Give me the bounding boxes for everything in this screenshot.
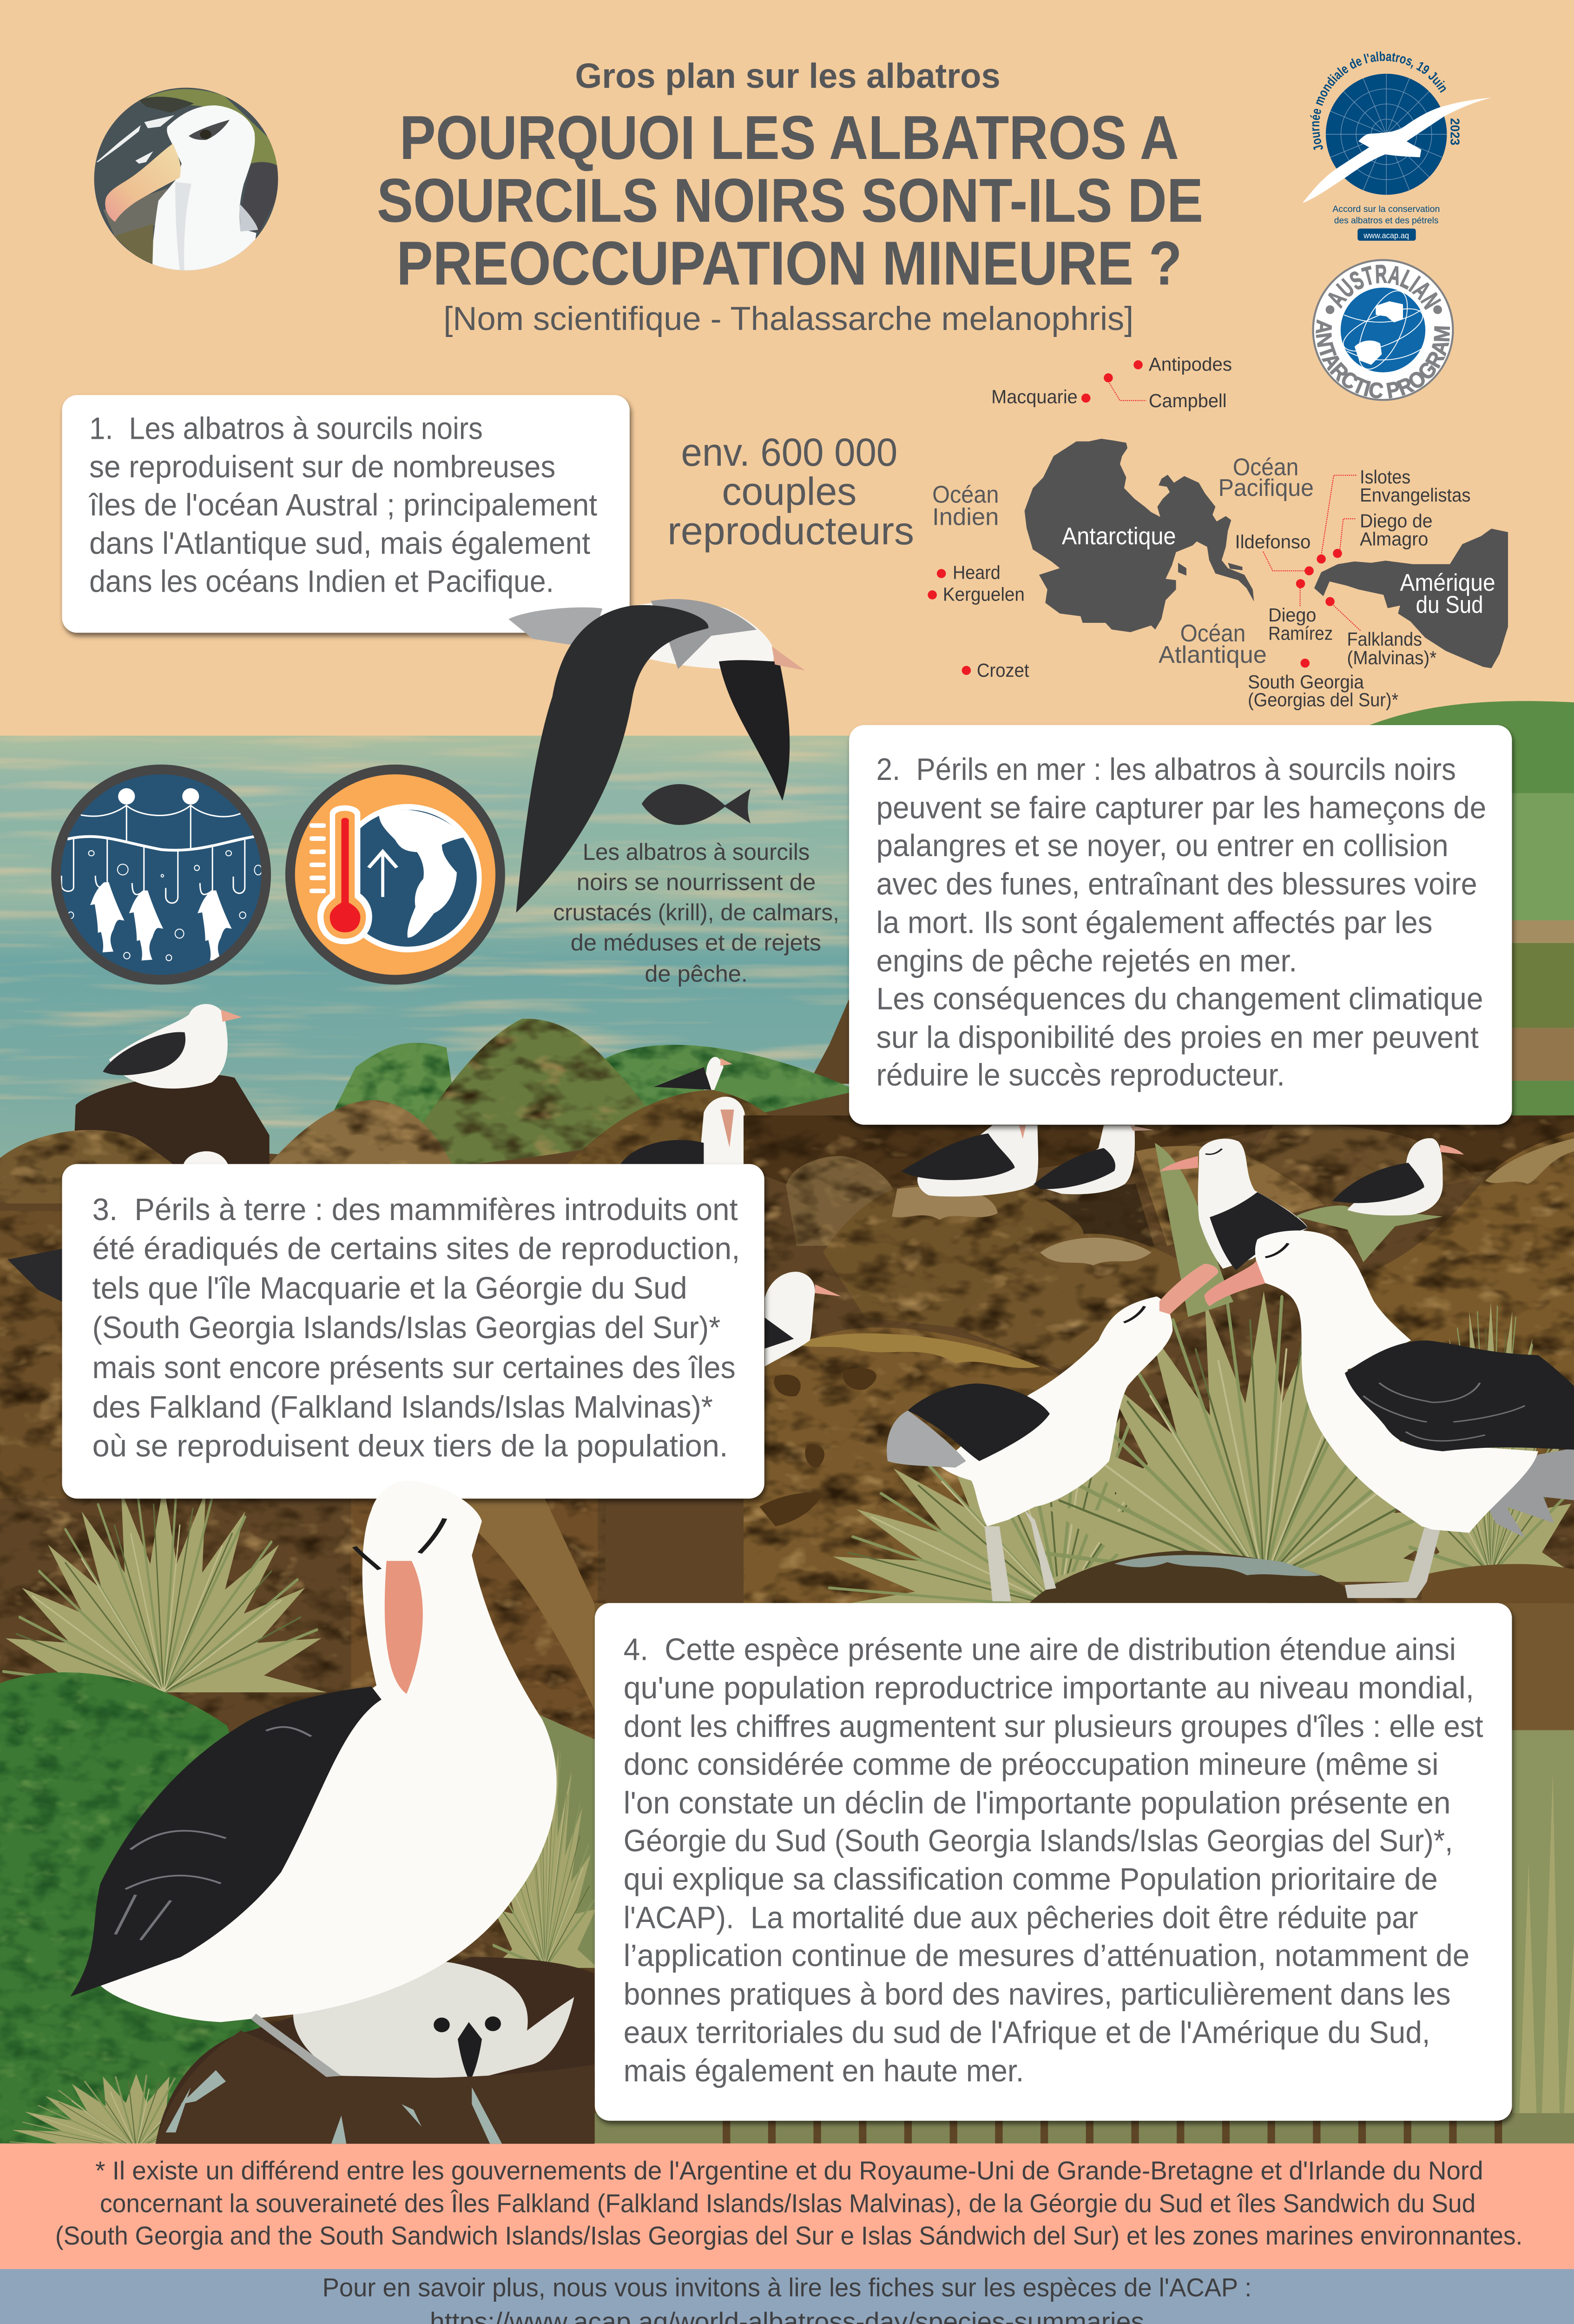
map island labels: Ildefonso <box>1235 531 1311 552</box>
map ocean and continent labels: Antarctique <box>1062 523 1176 550</box>
brown mounds, upper left and centre <box>0 1090 825 1514</box>
panel 3: perils on land: mais sont encore présents sur certaines des îles <box>92 1351 736 1385</box>
map island labels: Islotes <box>1360 466 1410 488</box>
footnote band: concernant la souveraineté des Îles Falkland (Falkland Islands/Islas Malvinas), de la Géorgie du Sud et îles Sandwich du Sud <box>100 2189 1475 2218</box>
main title: SOURCILS NOIRS SONT-ILS DE <box>377 166 1203 235</box>
panel 3: perils on land: (South Georgia Islands/Islas Georgias del Sur)* <box>92 1311 720 1345</box>
panel 3: perils on land: tels que l'île Macquarie et la Géorgie du Sud <box>92 1271 687 1306</box>
map island labels: Kerguelen <box>943 583 1025 605</box>
nest <box>156 1957 594 2144</box>
breeding pairs statistic: couples <box>722 469 856 513</box>
panel 1: breeding range <box>62 395 630 633</box>
strip of grass along lower edge and right of card 4 <box>595 1603 1574 2150</box>
map island labels: Diego de <box>1360 510 1432 532</box>
panel 2: perils at sea: engins de pêche rejetés en mer. <box>876 944 1297 978</box>
panel 3: perils on land: été éradiqués de certains sites de reproduction, <box>92 1232 740 1266</box>
footnote band <box>0 2144 1574 2269</box>
map island labels: Almagro <box>1360 528 1428 549</box>
brown mounds, right side <box>744 1116 1574 1604</box>
chick <box>293 1960 574 2079</box>
map island labels <box>943 354 1471 710</box>
breeding pairs statistic: env. 600 000 <box>681 430 897 474</box>
logo: Australian Antarctic Program <box>1311 259 1455 404</box>
map ocean and continent labels: du Sud <box>1416 591 1483 618</box>
panel 3: perils on land: 3. Périls à terre : des mammifères introduits ont <box>92 1193 738 1227</box>
logo: World Albatross Day ACAP: Accord sur la conservation <box>1332 204 1440 214</box>
map land: Antarctica and South America <box>1025 439 1508 668</box>
map island labels: Macquarie <box>991 386 1078 408</box>
breeding pairs statistic: reproducteurs <box>667 508 914 553</box>
map ocean and continent labels: Indien <box>932 503 999 530</box>
nests bottom right <box>1030 1551 1574 1603</box>
adult eyes <box>355 1519 445 1570</box>
panel 4: status and mitigation: qu'une population reproductrice importante au niveau mondial, <box>624 1671 1474 1705</box>
main title <box>377 103 1203 298</box>
map ocean and continent labels: Océan <box>932 482 999 508</box>
courting bird left <box>887 1264 1218 1601</box>
map island labels: Falklands <box>1347 628 1422 650</box>
supertitle: Gros plan sur les albatros <box>575 56 1001 95</box>
standing bird behind pair <box>1159 1139 1308 1270</box>
map island labels: South Georgia <box>1248 671 1364 693</box>
map ocean and continent labels: Atlantique <box>1159 641 1267 668</box>
group of birds right <box>765 1125 1574 1601</box>
panel 2: perils at sea: peuvent se faire capturer par les hameçons de <box>876 791 1486 825</box>
icon: longline fishing <box>51 765 271 984</box>
map: breeding sites <box>928 354 1508 710</box>
lower left ground <box>0 1484 606 2150</box>
panel 3: perils on land <box>62 1164 764 1499</box>
map island labels: Crozet <box>977 660 1029 681</box>
breeding pairs statistic <box>667 430 914 553</box>
logo: World Albatross Day ACAP: des albatros et des pétrels <box>1334 215 1439 225</box>
map leader lines <box>1108 381 1361 631</box>
logo: World Albatross Day ACAP: 2023 <box>1448 118 1462 145</box>
logo: World Albatross Day ACAP: www.acap.aq <box>1363 231 1409 240</box>
panel 4: status and mitigation: l'ACAP). La mortalité due aux pêcheries doit être réduite par <box>624 1901 1418 1935</box>
bird peeking beside card 3 <box>765 1272 842 1367</box>
panel 4: status and mitigation: bonnes pratiques à bord des navires, particulièrement dans les <box>624 1977 1451 2012</box>
main title: PREOCCUPATION MINEURE ? <box>396 229 1182 298</box>
panel 4: status and mitigation: dont les chiffres augmentent sur plusieurs groupes d'îles : elle est <box>624 1710 1483 1744</box>
panel 3: perils on land: des Falkland (Falkland Islands/Islas Malvinas)* <box>92 1390 713 1425</box>
further reading band: Pour en savoir plus, nous vous invitons à lire les fiches sur les espèces de l'ACAP : <box>323 2273 1251 2302</box>
map site markers <box>928 360 1342 675</box>
panel 2: perils at sea: Les conséquences du changement climatique <box>876 982 1483 1017</box>
small background birds, centre <box>7 1057 748 1302</box>
logo: Australian Antarctic Program: AUSTRALIAN <box>1321 259 1446 313</box>
panel 3: perils on land: où se reproduisent deux tiers de la population. <box>92 1429 728 1464</box>
diet caption: crustacés (krill), de calmars, <box>553 899 839 925</box>
panel 4: status and mitigation: Géorgie du Sud (South Georgia Islands/Islas Georgias del Sur)*, <box>624 1824 1453 1858</box>
panel 1: breeding range: dans les océans Indien et Pacifique. <box>89 564 554 599</box>
map island labels: Antipodes <box>1149 354 1232 375</box>
bird under card 2, right <box>1034 1125 1154 1194</box>
panel 1: breeding range: îles de l'océan Austral ; principalement <box>88 488 598 522</box>
diet caption: de pêche. <box>645 960 748 987</box>
nesting bird top right <box>1294 1138 1464 1262</box>
main title: POURQUOI LES ALBATROS A <box>400 103 1179 172</box>
further reading band <box>0 2269 1574 2324</box>
panel 4: status and mitigation: l’application continue de mesures d’atténuation, notamment de <box>624 1939 1469 1973</box>
scientific name: [Nom scientifique - Thalassarche melanophris] <box>443 300 1133 337</box>
map ocean and continent labels: Amérique <box>1400 569 1495 596</box>
back hills <box>0 1019 863 2150</box>
footnote band: * Il existe un différend entre les gouvernements de l'Argentine et du Royaume-Uni de Grande-Bretagne et d'Irlande du Nord <box>95 2156 1483 2185</box>
panel 4: status and mitigation: eaux territoriales du sud de l'Afrique et de l'Amérique du Sud, <box>624 2016 1430 2050</box>
panel 1: breeding range: 1. Les albatros à sourcils noirs <box>89 411 483 446</box>
diet caption: noirs se nourrissent de <box>577 869 816 895</box>
panel 2: perils at sea: réduire le succès reproducteur. <box>876 1058 1285 1093</box>
logo: World Albatross Day ACAP <box>1303 49 1491 241</box>
panel 2: perils at sea <box>849 725 1512 1125</box>
icon: climate warming <box>285 765 505 984</box>
courting bird right <box>1205 1230 1574 1598</box>
map island labels: (Malvinas)* <box>1347 647 1436 668</box>
panel 4: status and mitigation: 4. Cette espèce présente une aire de distribution étendue ainsi <box>624 1632 1456 1667</box>
adult body <box>100 1480 557 2022</box>
mound with nesting bird left <box>72 1004 270 1196</box>
flying albatross <box>508 599 805 913</box>
adult wing <box>70 1687 382 1997</box>
bird under card 2, left <box>902 1125 1038 1196</box>
panel 2: perils at sea: sur la disponibilité des proies en mer peuvent <box>876 1020 1479 1055</box>
panel 1: breeding range: se reproduisent sur de nombreuses <box>89 450 555 484</box>
map island labels: Envangelistas <box>1360 484 1471 506</box>
panel 4: status and mitigation: donc considérée comme de préoccupation mineure (même si <box>624 1747 1439 1782</box>
map island labels: (Georgias del Sur)* <box>1248 689 1398 710</box>
panel 2: perils at sea: 2. Périls en mer : les albatros à sourcils noirs <box>876 753 1456 787</box>
panel 4: status and mitigation <box>595 1603 1512 2121</box>
panel 4: status and mitigation: qui explique sa classification comme Population prioritaire de <box>624 1862 1438 1897</box>
diet caption: Les albatros à sourcils <box>583 838 810 865</box>
footnote band: (South Georgia and the South Sandwich Islands/Islas Georgias del Sur e Islas Sándwich del Sur) et les zones marines environnantes. <box>55 2221 1522 2250</box>
photo: albatross head <box>92 86 279 271</box>
panel 4: status and mitigation: l'on constate un déclin de l'importante population présente en <box>624 1786 1451 1821</box>
map island labels: Ramírez <box>1268 622 1333 644</box>
tussock grass right <box>825 1143 1574 1608</box>
big albatross with chick on nest <box>70 1480 594 2144</box>
adult bill <box>385 1561 423 1694</box>
diet caption <box>553 838 839 987</box>
panel 2: perils at sea: palangres et se noyer, ou entrer en collision <box>876 829 1449 863</box>
map island labels: Diego <box>1268 604 1316 626</box>
map ocean and continent labels: Océan <box>1233 454 1298 481</box>
panel 4: status and mitigation: mais également en haute mer. <box>624 2054 1024 2088</box>
map ocean and continent labels: Pacifique <box>1218 475 1314 502</box>
map ocean and continent labels <box>932 454 1495 668</box>
panel 1: breeding range: dans l'Atlantique sud, mais également <box>89 526 591 561</box>
map ocean and continent labels: Océan <box>1180 620 1245 647</box>
right coastal cliff <box>808 701 1574 1126</box>
nest rim <box>156 2031 594 2144</box>
panel 2: perils at sea: la mort. Ils sont également affectés par les <box>876 905 1432 940</box>
icon: fish <box>642 784 751 825</box>
diet caption: de méduses et de rejets <box>571 929 821 956</box>
map island labels: Heard <box>953 561 1001 583</box>
logo: World Albatross Day ACAP: Journée mondiale de l'albatros, 19 Juin <box>1308 49 1451 153</box>
panel 2: perils at sea: avec des funes, entraînant des blessures voire <box>876 867 1477 902</box>
sea <box>0 736 1574 1190</box>
map island labels: Campbell <box>1149 390 1227 411</box>
logo: Australian Antarctic Program: ANTARCTIC PROGRAM <box>1311 319 1455 404</box>
